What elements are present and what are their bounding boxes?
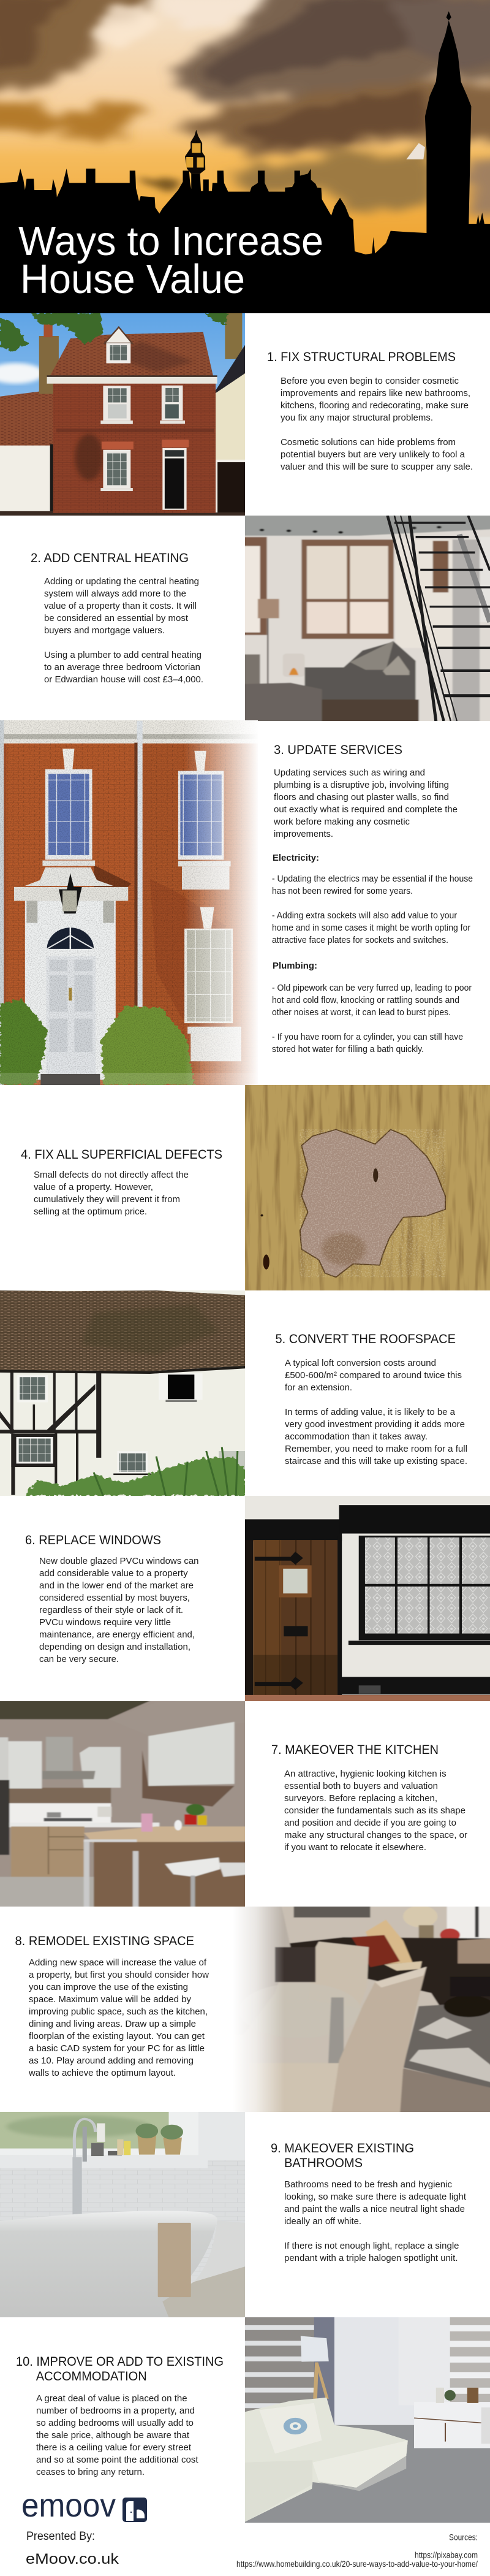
title (18, 218, 323, 302)
heading: ACCOMMODATION (36, 2369, 147, 2384)
body text: dining and living areas. Draw up a simple (29, 2019, 196, 2029)
photo: timber framed cottage (0, 1290, 245, 1496)
electricity tips: home and in some cases it might be worth opting for (272, 923, 470, 933)
body text: to an average three bedroom Victorian (44, 662, 200, 673)
intro text: plumbing is a disruptive job, involving lifting (274, 780, 449, 790)
body text: selling at the optimum price. (34, 1206, 147, 1217)
body text: as 10. Play around adding and removing (29, 2056, 194, 2066)
photo: white sofa in bright room (245, 2317, 490, 2523)
subheading: electricity: Electricity: (273, 853, 319, 863)
heading (16, 2355, 224, 2384)
panel: 2. add central heating (31, 513, 490, 724)
panel: 3. update services (0, 720, 473, 1085)
body text: valuer and this will be sure to scupper any sale. (281, 462, 473, 472)
plumbing tips (272, 983, 472, 1054)
panel: 1. fix structural problems (0, 313, 473, 516)
body text: if you want to relocate it elsewhere. (284, 1842, 426, 1853)
heading: 6. REPLACE WINDOWS (25, 1533, 161, 1547)
panel: 9. makeover existing bathrooms (0, 2112, 467, 2317)
body text: accommodation than it takes away. (285, 1431, 428, 1442)
panel: 7. makeover the kitchen (0, 1698, 467, 1910)
intro text: improvements. (274, 829, 333, 839)
body text: value of a property than it costs. It will (44, 601, 197, 611)
sources: Sources: (449, 2533, 478, 2542)
intro text: Updating services such as wiring and (274, 768, 425, 778)
body text: A great deal of value is placed on the (36, 2393, 187, 2404)
body text: system will always add more to the (44, 589, 186, 599)
body text: the sale price, although be aware that (36, 2430, 190, 2441)
body text: space. Maximum value will be added by (29, 1994, 191, 2005)
panel: 4. fix all superficial defects (21, 1085, 490, 1290)
body text: potential buyers but are very unlikely to fool a (281, 449, 466, 460)
body text: staircase and this will take up existing space. (285, 1456, 467, 1466)
body text: and so at some point the additional cost (36, 2455, 198, 2465)
heading: 1. FIX STRUCTURAL PROBLEMS (267, 350, 456, 364)
body text: Cosmetic solutions can hide problems from (281, 437, 456, 448)
hero header (0, 0, 490, 313)
body text: pendant with a triple halogen spotlight unit. (284, 2253, 458, 2263)
body text (34, 1170, 189, 1217)
photo: red brick house (0, 313, 245, 516)
body text: considered essential by most buyers, (39, 1593, 190, 1603)
heading: 10. IMPROVE OR ADD TO EXISTING (16, 2355, 224, 2369)
body text: a property, but first you should consider how (29, 1970, 209, 1980)
body text: you fix any major structural problems. (281, 413, 433, 423)
electricity tips: - Adding extra sockets will also add value to your (272, 910, 457, 921)
body text: If there is not enough light, replace a single (284, 2241, 459, 2251)
electricity tips: attractive face plates for sockets and switches. (272, 935, 448, 945)
photo: modern kitchen (0, 1701, 245, 1907)
photo: dining table and living room, faded edge (240, 1907, 490, 2112)
body text: maintenance, are energy efficient and, (39, 1629, 195, 1640)
body text: depending on design and installation, (39, 1642, 190, 1652)
body text: looking, so make sure there is adequate light (284, 2192, 467, 2202)
body text: ceases to bring any return. (36, 2467, 145, 2477)
body text: make any structural changes to the space, or (284, 1830, 467, 1840)
body text: walls to achieve the optimum layout. (28, 2068, 176, 2078)
subheading: plumbing: Plumbing: (273, 961, 317, 971)
body text: Adding new space will increase the value of (29, 1957, 207, 1968)
title: Ways to Increase (18, 218, 323, 264)
body text: for an extension. (285, 1382, 352, 1393)
body text: Remember, you need to make room for a full (285, 1444, 467, 1454)
body text: An attractive, hygienic looking kitchen is (284, 1769, 447, 1779)
body text: improvements and repairs like new bathrooms, (281, 388, 470, 398)
heading: 5. CONVERT THE ROOFSPACE (276, 1332, 456, 1346)
body text (281, 376, 473, 472)
body text (39, 1556, 198, 1664)
body text: New double glazed PVCu windows can (39, 1556, 198, 1566)
body text: so adding bedrooms will usually add to (36, 2418, 194, 2428)
photo: white freestanding bath (0, 2112, 245, 2317)
photo: loft living room with black staircase (245, 516, 490, 721)
icon: house door (123, 2498, 147, 2522)
heading: BATHROOMS (284, 2156, 363, 2170)
electricity tips (272, 874, 473, 945)
intro text: floors and chasing out plaster walls, so find (274, 792, 449, 802)
presenter: eMoov.co.uk (26, 2551, 119, 2567)
body text: and paint the walls a nice neutral light shade (284, 2204, 465, 2214)
body text: and in the lower end of the market are (39, 1580, 194, 1591)
body text: add considerable value to a property (39, 1568, 188, 1579)
body text: essential both to buyers and valuation (284, 1781, 438, 1791)
logo: emoov: emoov (21, 2487, 116, 2524)
title: House Value (20, 256, 245, 302)
heading: 7. MAKEOVER THE KITCHEN (271, 1743, 439, 1757)
body text: Adding or updating the central heating (44, 576, 199, 587)
panel: 10. improve or add to existing accommodation (16, 2317, 490, 2523)
sources (236, 2533, 478, 2569)
body text: Before you even begin to consider cosmetic (281, 376, 459, 386)
body text: there is a ceiling value for every street (36, 2442, 192, 2453)
body text: very good investment providing it adds more (285, 1419, 465, 1430)
heading: 2. ADD CENTRAL HEATING (31, 551, 189, 565)
body text: Using a plumber to add central heating (44, 650, 202, 660)
body text: number of bedrooms in a property, and (36, 2406, 195, 2416)
body text: surveyors. Before replacing a kitchen, (284, 1793, 437, 1804)
body text: can be very secure. (39, 1654, 119, 1664)
presenter (26, 2530, 119, 2567)
electricity tips: - Updating the electrics may be essential if the house (272, 874, 473, 884)
intro text: out exactly what is required and complete the (274, 804, 458, 815)
plumbing tips: stored hot water for filling a bath quickly. (272, 1044, 424, 1054)
body text: improving public space, such as the kitchen, (29, 2006, 208, 2017)
panel: 6. replace windows (25, 1496, 490, 1701)
body text: or Edwardian house will cost £3–4,000. (44, 674, 203, 685)
photo: old wooden door and lace window (245, 1496, 490, 1701)
body text: value of a property. However, (34, 1182, 153, 1192)
body text: consider the fundamentals such as its shape (284, 1805, 466, 1816)
body text: floorplan of the existing layout. You can get (29, 2031, 205, 2041)
body text: PVCu windows require very little (39, 1617, 171, 1628)
body text: Bathrooms need to be fresh and hygienic (284, 2179, 452, 2190)
body text: £500-600/m² compared to around twice this (285, 1370, 462, 1381)
body text: In terms of adding value, it is likely to be a (285, 1407, 456, 1417)
body text (44, 576, 203, 685)
body text: be considered an essential by most (44, 613, 189, 623)
body text: ideally an off white. (284, 2216, 361, 2227)
plumbing tips: other noises at worst, it can lead to burst pipes. (272, 1007, 451, 1018)
body text: Small defects do not directly affect the (34, 1170, 189, 1180)
heading: 9. MAKEOVER EXISTING (271, 2141, 414, 2155)
plumbing tips: hot and cold flow, knocking or rattling sounds and (272, 995, 459, 1005)
body text: and position and decide if you are going to (284, 1818, 456, 1828)
heading: 3. UPDATE SERVICES (274, 743, 402, 757)
body text: kitchens, flooring and redecorating, make sure (281, 400, 469, 411)
heading (271, 2141, 414, 2170)
plumbing tips: - If you have room for a cylinder, you can still have (272, 1032, 463, 1042)
body text (28, 1957, 209, 2078)
intro text (273, 768, 458, 839)
photo: sunset skyline with clock tower (0, 0, 490, 313)
panel: 5. convert the roofspace (0, 1290, 467, 1496)
body text (284, 2179, 467, 2263)
body text (284, 1769, 467, 1853)
body text: A typical loft conversion costs around (285, 1358, 436, 1368)
sources: https://pixabay.com (415, 2550, 478, 2560)
electricity tips: has not been rewired for some years. (272, 886, 413, 896)
heading: 4. FIX ALL SUPERFICIAL DEFECTS (21, 1148, 222, 1162)
body text: cumulatively they will prevent it from (34, 1194, 180, 1205)
body text: you can improve the use of the existing (29, 1982, 188, 1992)
body text: a basic CAD system for your PC for as little (29, 2043, 205, 2054)
body text: regardless of their style or lack of it. (39, 1605, 183, 1615)
photo: Georgian brick house with white door, faded edge (0, 720, 258, 1085)
footer (21, 2487, 478, 2569)
heading: 8. REMODEL EXISTING SPACE (15, 1934, 194, 1948)
intro text: work before making any cosmetic (273, 817, 410, 827)
body text (285, 1358, 467, 1466)
body text: buyers and mortgage valuers. (44, 625, 165, 636)
photo: damaged plaster wall (245, 1085, 490, 1290)
body text (36, 2393, 198, 2477)
panel: 8. remodel existing space (15, 1904, 490, 2114)
presenter: Presented By: (26, 2530, 95, 2543)
plumbing tips: - Old pipework can be very furred up, leading to poor (272, 983, 472, 993)
